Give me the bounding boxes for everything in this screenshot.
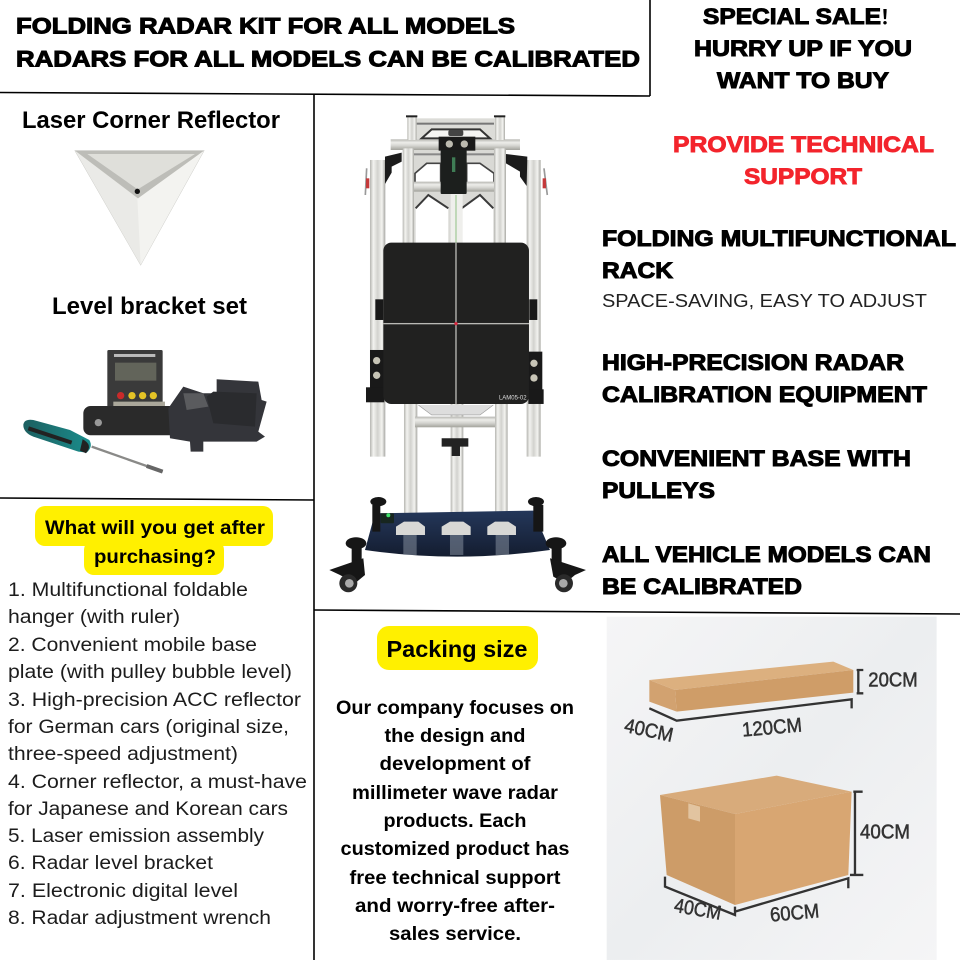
company description: free technical support xyxy=(350,867,561,889)
company description: sales service. xyxy=(389,923,521,945)
callout: packing size: Packing size xyxy=(386,636,528,662)
upper frame xyxy=(391,118,520,243)
feature: base with pulleys: PULLEYS xyxy=(602,478,715,503)
technical support heading: PROVIDE TECHNICAL xyxy=(673,132,934,157)
callout: what will you get xyxy=(35,506,273,575)
casters and knobs xyxy=(329,497,586,592)
feature: base with pulleys xyxy=(602,446,911,503)
company description: the design and xyxy=(384,725,526,747)
long carton: 120CM xyxy=(741,714,803,742)
adjusting knob xyxy=(442,438,468,456)
large carton: 40CM xyxy=(672,895,723,925)
callout: what will you get: What will you get after xyxy=(45,517,265,539)
feature: precision equipment: HIGH-PRECISION RADAR xyxy=(602,350,904,375)
company description: Our company focuses on xyxy=(336,697,574,719)
bracket xyxy=(83,379,267,452)
sale callout: WANT TO BUY xyxy=(717,68,889,93)
feature: precision equipment: CALIBRATION EQUIPMENT xyxy=(602,382,927,407)
feature: folding rack: RACK xyxy=(602,258,674,283)
feature: all vehicle models: BE CALIBRATED xyxy=(602,574,802,599)
feature: precision equipment xyxy=(602,350,927,407)
contents list: three-speed adjustment) xyxy=(8,744,238,765)
large carton: 40CM xyxy=(860,821,910,843)
panel: what you get xyxy=(8,506,307,929)
contents list: 5. Laser emission assembly xyxy=(8,826,265,847)
company description: and worry-free after- xyxy=(355,895,555,917)
side mounts xyxy=(366,299,544,404)
title xyxy=(16,14,640,72)
heading: level bracket set: Level bracket set xyxy=(52,293,247,320)
aluminium columns xyxy=(370,115,541,525)
long carton: 40CM xyxy=(622,715,675,747)
company description: millimeter wave radar xyxy=(352,782,558,804)
contents list: 1. Multifunctional foldable xyxy=(8,580,248,601)
contents list: hanger (with ruler) xyxy=(8,607,180,628)
large carton: 60CM xyxy=(769,900,820,927)
contents list: plate (with pulley bubble level) xyxy=(8,662,292,683)
mobile base plate xyxy=(365,511,550,557)
callout: what will you get: purchasing? xyxy=(94,546,216,568)
technical support heading xyxy=(673,132,934,189)
feature: all vehicle models: ALL VEHICLE MODELS CAN xyxy=(602,542,931,567)
panel: packing size xyxy=(336,617,937,960)
company description: customized product has xyxy=(340,838,570,860)
feature: all vehicle models xyxy=(602,542,931,599)
title: RADARS FOR ALL MODELS CAN BE CALIBRATED xyxy=(16,46,640,72)
feature list xyxy=(602,226,956,599)
technical support heading: SUPPORT xyxy=(744,164,862,189)
long carton: 20CM xyxy=(868,670,918,692)
large carton xyxy=(660,776,910,927)
callout: packing size xyxy=(377,626,538,670)
sale callout: ！ xyxy=(880,7,900,29)
contents list xyxy=(8,580,307,929)
long carton xyxy=(622,662,918,747)
company description xyxy=(336,697,574,945)
feature: folding rack xyxy=(602,226,956,311)
company description: products. Each xyxy=(384,810,526,832)
target plate xyxy=(383,243,529,404)
icon: corner reflector xyxy=(75,151,204,265)
screwdriver xyxy=(23,420,163,472)
target plate: LAM05-02 xyxy=(499,396,527,402)
company description: development of xyxy=(380,753,531,775)
radar calibration rack photo xyxy=(329,115,586,592)
contents list: 4. Corner reflector, a must-have xyxy=(8,772,307,793)
contents list: 8. Radar adjustment wrench xyxy=(8,908,271,929)
feature: folding rack: FOLDING MULTIFUNCTIONAL xyxy=(602,226,956,251)
contents list: 6. Radar level bracket xyxy=(8,853,214,874)
sale callout: HURRY UP IF YOU xyxy=(694,36,912,61)
sale callout: SPECIAL SALE xyxy=(703,4,881,29)
contents list: 3. High-precision ACC reflector xyxy=(8,690,302,711)
digital level xyxy=(107,350,165,407)
contents list: 2. Convenient mobile base xyxy=(8,635,257,656)
contents list: 7. Electronic digital level xyxy=(8,881,238,902)
title: FOLDING RADAR KIT FOR ALL MODELS xyxy=(16,14,515,38)
contents list: for Japanese and Korean cars xyxy=(8,799,288,820)
icon: level bracket set xyxy=(23,350,267,472)
feature: folding rack: SPACE-SAVING, EASY TO ADJUST xyxy=(602,291,927,311)
feature: base with pulleys: CONVENIENT BASE WITH xyxy=(602,446,911,471)
contents list: for German cars (original size, xyxy=(8,717,289,738)
fold hinges and latches xyxy=(365,153,547,195)
heading: laser corner reflector: Laser Corner Reflector xyxy=(22,107,280,134)
carton dimensions photo xyxy=(607,617,937,960)
sale callout xyxy=(694,4,912,93)
laser emitter xyxy=(439,130,475,243)
